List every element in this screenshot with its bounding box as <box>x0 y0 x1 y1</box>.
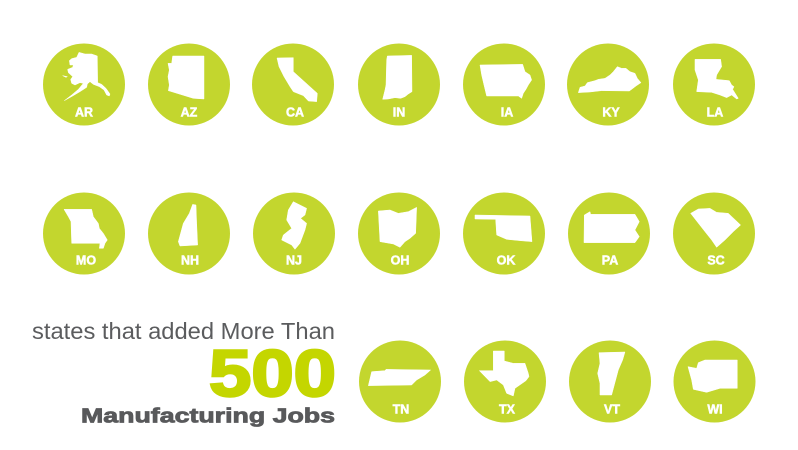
circle background <box>569 340 651 422</box>
state label: OH <box>391 254 409 268</box>
state label: OK <box>497 254 515 268</box>
icon: Alaska outline <box>63 52 110 101</box>
icon: Louisiana outline <box>695 59 738 99</box>
badge: LA <box>673 44 755 126</box>
circle background <box>253 192 335 274</box>
icon: New Jersey outline <box>282 202 307 249</box>
badge: OH <box>358 192 440 274</box>
headline line: Manufacturing Jobs: Manufacturing Jobs <box>81 406 335 428</box>
icon: Missouri outline <box>64 209 107 248</box>
icon: Tennessee outline <box>368 369 431 386</box>
icon: Washington outline <box>688 360 737 392</box>
badge: IN <box>358 44 440 126</box>
icon: Vermont outline <box>598 352 625 395</box>
state label: CA <box>286 106 304 120</box>
big number 500: 500 <box>209 336 336 410</box>
icon: Texas outline <box>479 351 529 396</box>
icon: Arizona outline <box>168 56 204 99</box>
circle background <box>673 44 755 126</box>
icon: Indiana outline <box>383 55 412 99</box>
icon: Iowa outline <box>480 64 532 98</box>
state label: LA <box>707 106 723 120</box>
state label: SC <box>707 254 725 268</box>
circle background <box>43 192 125 274</box>
state label: PA <box>602 254 618 268</box>
state label: AZ <box>181 106 198 120</box>
circle background <box>568 192 650 274</box>
badge: SC <box>673 192 755 274</box>
badge: AR <box>43 44 125 126</box>
circle background <box>252 44 334 126</box>
badge: WI <box>674 340 756 422</box>
circle background <box>674 340 756 422</box>
badge: AZ <box>148 44 230 126</box>
icon: New Hampshire outline <box>178 204 198 246</box>
state label: WI <box>707 402 723 416</box>
circle background <box>359 340 441 422</box>
circle background <box>358 44 440 126</box>
icon: Pennsylvania outline <box>584 212 639 243</box>
circle background <box>43 44 125 126</box>
headline text block <box>32 318 336 428</box>
state label: IA <box>501 106 513 120</box>
icon: California outline <box>277 58 317 102</box>
circle background <box>148 192 230 274</box>
state label: IN <box>393 106 405 120</box>
circle background <box>464 340 546 422</box>
badge: VT <box>569 340 651 422</box>
state label: MO <box>76 254 96 268</box>
icon: South Carolina outline <box>691 208 741 247</box>
icon: Kentucky outline <box>578 67 641 93</box>
badge: IA <box>463 44 545 126</box>
badge: OK <box>463 192 545 274</box>
circle background <box>358 192 440 274</box>
state label: KY <box>602 106 620 120</box>
circle background <box>463 44 545 126</box>
state label: AR <box>75 106 93 120</box>
state label: NH <box>181 254 199 268</box>
state label: TX <box>499 402 516 416</box>
circle background <box>148 44 230 126</box>
icon: Ohio outline <box>378 207 417 247</box>
icon: Oklahoma outline <box>475 215 532 242</box>
badge: NH <box>148 192 230 274</box>
badge: PA <box>568 192 650 274</box>
headline line: states that added More Than: states that added More Than <box>32 318 335 344</box>
badge: TX <box>464 340 546 422</box>
state label: NJ <box>286 254 302 268</box>
badge: TN <box>359 340 441 422</box>
badge: NJ <box>253 192 335 274</box>
badge: CA <box>252 44 334 126</box>
state label: VT <box>604 402 620 416</box>
badge: MO <box>43 192 125 274</box>
badge: KY <box>567 44 649 126</box>
circle background <box>673 192 755 274</box>
state label: TN <box>393 402 409 416</box>
circle background <box>567 44 649 126</box>
circle background <box>463 192 545 274</box>
